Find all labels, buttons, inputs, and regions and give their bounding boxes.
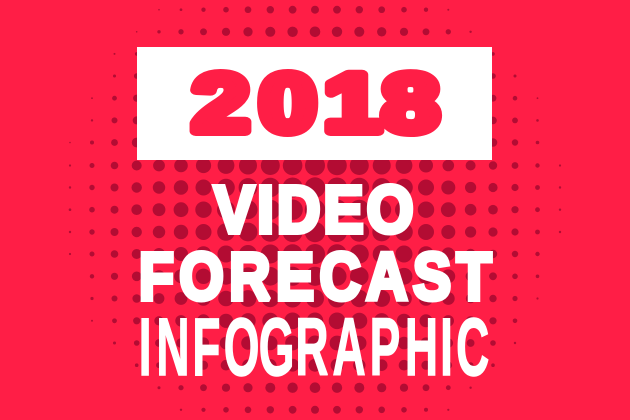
title line: video: VIDEO: [214, 172, 416, 247]
title line: infographic: INFOGRAPHIC: [139, 302, 489, 394]
white year panel: [137, 47, 492, 160]
year heading: 2018: [192, 57, 439, 149]
title line: forecast: FORECAST: [139, 240, 497, 315]
halftone dot field: [69, 6, 561, 414]
